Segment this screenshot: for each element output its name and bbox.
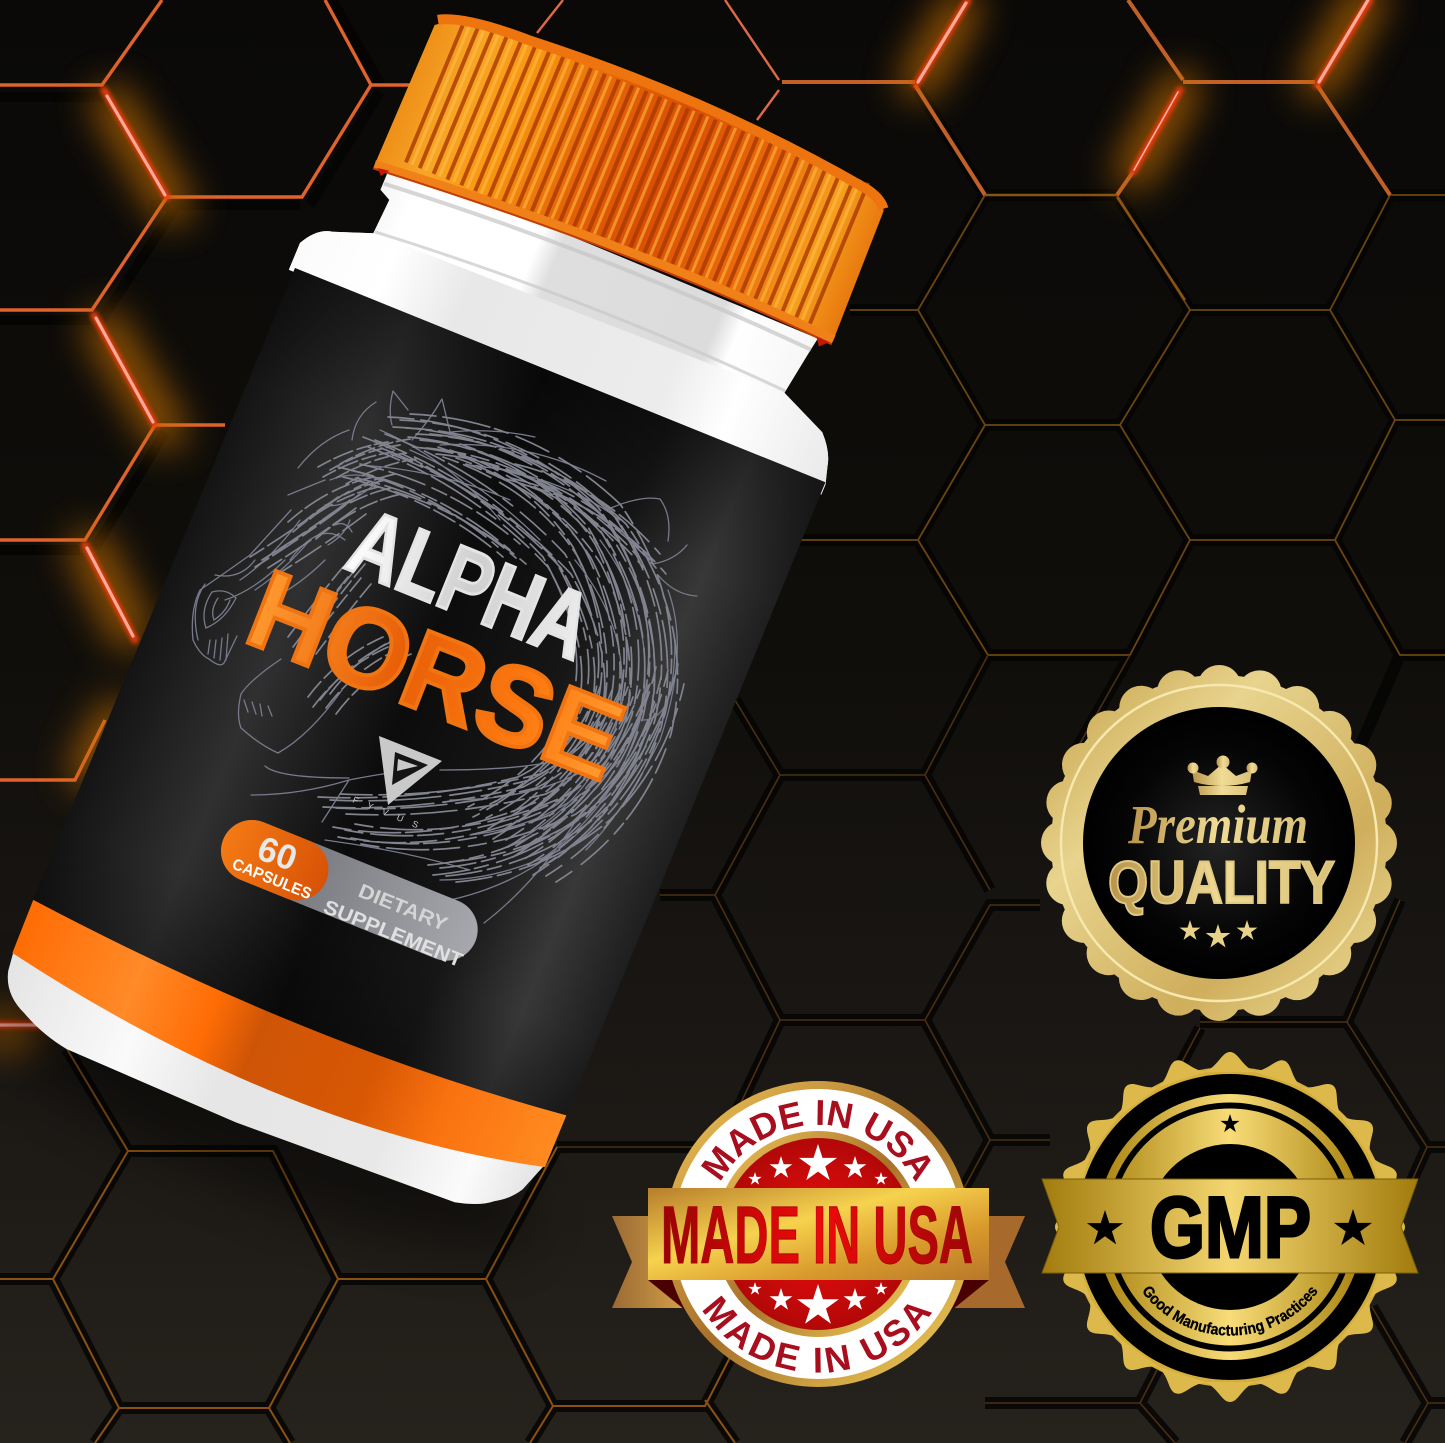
scalloped edge bbox=[1051, 675, 1387, 1011]
crown icon bbox=[1188, 756, 1258, 795]
black centre bbox=[1083, 707, 1355, 979]
product name: ALPHA: ALPHA bbox=[335, 488, 607, 680]
stars bbox=[748, 1144, 888, 1324]
red centre bbox=[722, 1138, 914, 1330]
badge: GMP bbox=[1041, 1052, 1419, 1402]
banner stars bbox=[1087, 1209, 1372, 1245]
orange neon glows bbox=[0, 0, 1370, 1030]
horse mane hatching bbox=[250, 414, 684, 882]
60: 60 bbox=[252, 829, 302, 879]
gold banner bbox=[1042, 1179, 1418, 1273]
GMP text: GMP bbox=[1150, 1180, 1311, 1276]
DIETARY: DIETARY bbox=[355, 880, 451, 936]
logo triangle mark bbox=[379, 736, 442, 805]
gold ring bbox=[1061, 685, 1377, 1001]
banner text: MADE IN USA bbox=[661, 1190, 973, 1281]
bottle neck and shoulder bbox=[287, 141, 876, 495]
QUALITY: QUALITY bbox=[1108, 849, 1335, 916]
horse mane outline bbox=[251, 430, 697, 923]
bottle base bbox=[0, 943, 547, 1238]
gold inner rim bbox=[715, 1131, 921, 1337]
logo wordmark: FYVUS bbox=[351, 795, 420, 830]
top curved text: MADE IN USA bbox=[701, 1100, 931, 1182]
orange pill bbox=[212, 811, 338, 910]
top star bbox=[1220, 1114, 1240, 1132]
spiked edge bbox=[1055, 1052, 1405, 1402]
horse line illustration bbox=[192, 391, 697, 923]
badge: made in usa bbox=[612, 1081, 1025, 1387]
gold ring bbox=[1097, 1094, 1363, 1360]
bottle shadow bbox=[0, 939, 561, 1298]
SUPPLEMENT: SUPPLEMENT bbox=[320, 896, 466, 972]
gold banner bbox=[648, 1188, 989, 1280]
Premium: Premium bbox=[1127, 794, 1308, 855]
white ring bbox=[673, 1089, 963, 1379]
outer rim bbox=[665, 1081, 971, 1387]
orange cap bbox=[372, 0, 898, 360]
thin black ring bbox=[1108, 1106, 1352, 1348]
orange band bbox=[0, 895, 566, 1199]
ribbon tails bbox=[612, 1216, 1025, 1310]
stars bbox=[1180, 920, 1257, 948]
grey pill bbox=[212, 811, 487, 970]
badge: premium quality bbox=[1051, 675, 1387, 1011]
black outer ring bbox=[1077, 1074, 1383, 1380]
capsule count pill bbox=[212, 811, 487, 972]
product name: HORSE: HORSE bbox=[232, 546, 640, 804]
CAPSULES: CAPSULES bbox=[230, 856, 314, 903]
black centre bbox=[1147, 1144, 1313, 1310]
bottle bbox=[0, 0, 944, 1238]
FYVUS logo bbox=[351, 736, 442, 830]
label bbox=[24, 263, 828, 1142]
bottom curved text: MADE IN USA bbox=[702, 1296, 932, 1373]
curved text: Good Manufacturing Practices bbox=[1144, 1286, 1318, 1336]
horse head outline bbox=[192, 391, 450, 753]
